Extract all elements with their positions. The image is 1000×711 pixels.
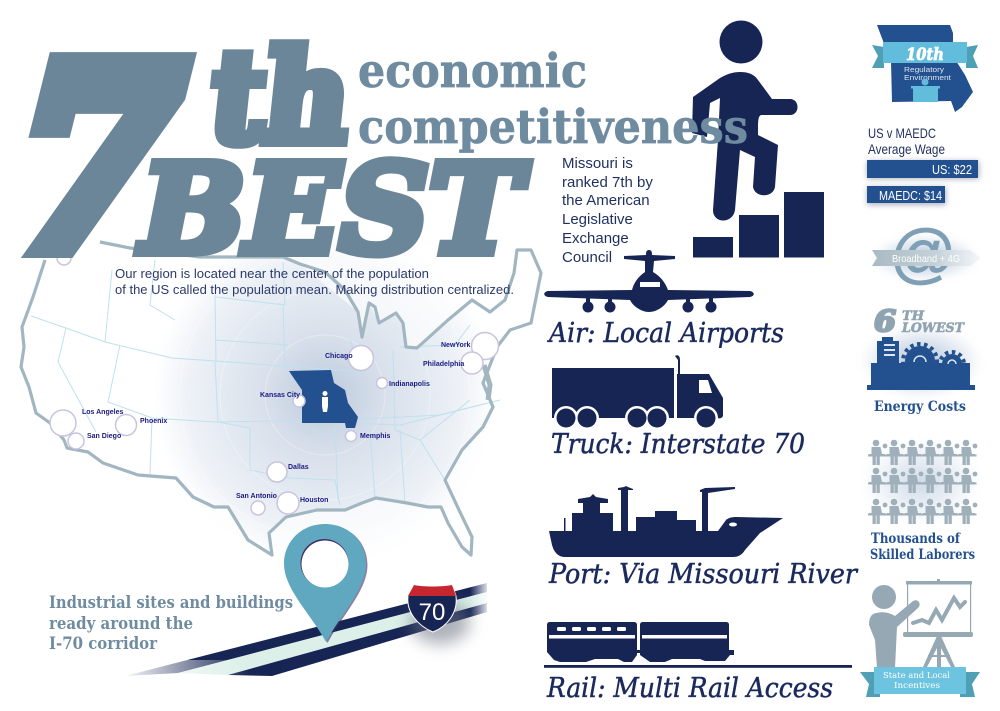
label: energy costs: Energy Costs — [874, 399, 966, 415]
city markers — [50, 251, 498, 515]
icon: interstate 70 shield — [408, 585, 470, 644]
label: port: Port: Via Missouri River — [548, 559, 859, 590]
icon: airplane — [544, 250, 754, 312]
label: laborers: Skilled Laborers — [870, 547, 975, 563]
badge: regulatory environment: Environment — [904, 73, 952, 82]
text: industrial sites: ready around the — [49, 614, 193, 633]
label: truck: Truck: Interstate 70 — [551, 429, 805, 460]
I-70 road — [120, 578, 490, 678]
icon: rows of workers — [868, 440, 977, 524]
title: 7th BEST — [0, 16, 529, 302]
icon: train — [544, 622, 852, 668]
label: laborers — [870, 531, 975, 563]
sixth lowest: 6 — [874, 304, 896, 338]
ranking text: Council — [562, 249, 612, 266]
badge: broadband: Broadband + 4G — [892, 253, 960, 265]
city labels: San Diego — [87, 433, 121, 440]
bar: US: US: $22 — [932, 162, 972, 177]
region description: of the US called the population mean. Making distribution centralized. — [115, 283, 514, 297]
wage heading: US v MAEDC — [868, 125, 936, 141]
bar shadows — [867, 161, 979, 179]
icon: presenter — [869, 579, 973, 668]
ranking text: ranked 7th by — [562, 174, 653, 191]
heading: economic competitiveness — [358, 44, 748, 155]
city labels: Philadelphia — [423, 361, 464, 368]
state lines — [31, 260, 500, 505]
city labels: Dallas — [288, 464, 309, 471]
badge: regulatory environment: Regulatory — [904, 65, 944, 74]
sixth lowest — [874, 304, 965, 338]
city labels: Phoenix — [140, 418, 167, 425]
city labels: Kansas City — [260, 392, 300, 399]
heading: economic competitiveness: competitiveness — [358, 100, 748, 155]
text: industrial sites — [49, 593, 293, 653]
coastline and borders — [21, 242, 541, 555]
city labels: Memphis — [360, 433, 390, 440]
label: air: Air: Local Airports — [546, 318, 784, 349]
ranking text: Missouri is — [562, 155, 633, 172]
wage heading — [868, 125, 945, 157]
text: industrial sites: I-70 corridor — [49, 634, 157, 653]
badge: broadband: @ — [890, 216, 956, 290]
sixth lowest: TH — [902, 309, 925, 324]
badge: energy costs — [859, 304, 983, 415]
ranking text — [562, 155, 653, 266]
city labels: Chicago — [325, 353, 353, 360]
icon: ship — [549, 486, 783, 557]
text: industrial sites: Industrial sites and buildings — [49, 593, 293, 612]
Missouri state — [289, 370, 358, 428]
wage heading: Average Wage — [868, 141, 945, 157]
bar: MAEDC: MAEDC: $14 — [879, 188, 942, 203]
icon: person climbing steps — [692, 20, 824, 258]
ranking text: Exchange — [562, 230, 629, 247]
region description — [115, 267, 514, 297]
region description: Our region is located near the center of the population — [115, 267, 429, 281]
badge: broadband — [870, 216, 981, 290]
city labels: San Antonio — [236, 493, 277, 500]
title: 7th BEST: BEST — [138, 137, 529, 281]
ranking text: the American — [562, 192, 650, 209]
sixth lowest: LOWEST — [901, 321, 965, 336]
badge: state and local incentives — [860, 579, 980, 697]
badge: regulatory environment: 10th — [906, 45, 944, 65]
icon: interstate 70 shield: 70 — [419, 599, 445, 626]
ribbon — [860, 672, 880, 697]
city labels — [82, 342, 471, 504]
wage comparison — [867, 125, 979, 205]
icon: person — [322, 391, 328, 412]
city labels: Los Angeles — [82, 409, 123, 416]
heading: economic competitiveness: economic — [358, 44, 587, 99]
icon: map pin — [284, 524, 368, 643]
icon: factory — [867, 337, 975, 390]
badge: regulatory environment — [872, 25, 978, 112]
label: laborers: Thousands of — [871, 531, 961, 547]
badge: skilled laborers — [861, 438, 981, 563]
map: United States — [21, 223, 541, 567]
icon: truck — [552, 355, 723, 430]
city labels: Indianapolis — [389, 381, 430, 388]
badge: state and local incentives: State and Local — [883, 671, 950, 681]
title: 7th BEST: th — [204, 22, 357, 171]
city labels: Houston — [300, 497, 328, 504]
ranking text: Legislative — [562, 211, 633, 228]
label: rail: Rail: Multi Rail Access — [546, 673, 833, 704]
badge: state and local incentives: Incentives — [894, 681, 940, 691]
city labels: NewYork — [441, 342, 471, 349]
population glow — [177, 259, 472, 530]
